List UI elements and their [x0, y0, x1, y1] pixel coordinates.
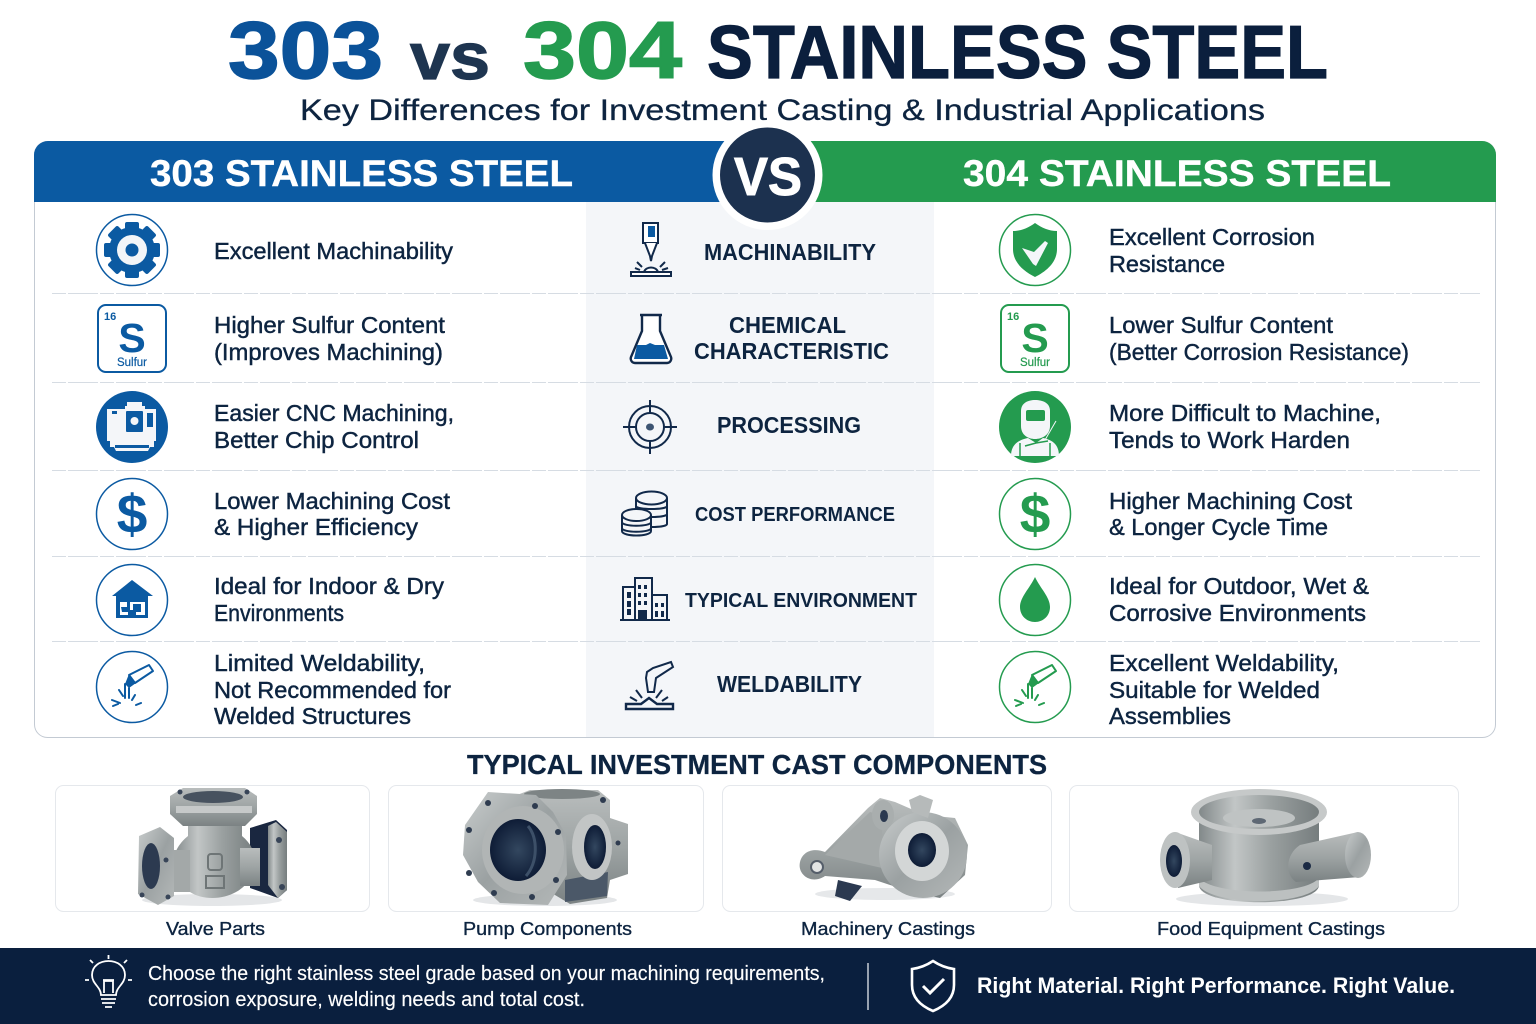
left column texts: (Improves Machining) [214, 339, 443, 365]
centre icon: flask [631, 315, 671, 363]
right column texts: Higher Machining Cost [1109, 488, 1353, 514]
header: 303 [34, 141, 730, 202]
card: pump components [388, 786, 704, 939]
icon: weld torch blue [96, 652, 168, 722]
icon: shield green [1000, 214, 1070, 286]
card: valve parts [56, 786, 370, 939]
footer advice text [148, 963, 825, 1011]
footer advice text: Choose the right stainless steel grade based on your machining requirements, [148, 963, 825, 985]
left column texts: Better Chip Control [214, 427, 419, 453]
centre label: chemical characteristic: CHARACTERISTIC [694, 338, 889, 364]
icon: sulfur green: Sulfur [1020, 357, 1050, 369]
icon: sulfur blue: Sulfur [117, 357, 147, 369]
left column texts: Ideal for Indoor & Dry [214, 573, 445, 599]
centre label: chemical characteristic [694, 312, 889, 364]
centre icon: target [623, 400, 677, 454]
centre label: chemical characteristic: CHEMICAL [729, 312, 846, 338]
right column texts: More Difficult to Machine, [1109, 400, 1381, 426]
icon: sulfur green: 16 [1007, 311, 1019, 323]
icon: CNC machine [96, 391, 168, 463]
pump casting [463, 789, 628, 906]
icon: dollar green: $ [1020, 483, 1050, 545]
centre icon: buildings [620, 578, 670, 620]
right column texts: Tends to Work Harden [1109, 427, 1350, 453]
icon: dollar green [1000, 478, 1070, 550]
centre label: weldability: WELDABILITY [717, 671, 862, 697]
label: Machinery Castings [801, 918, 975, 939]
food equipment casting [1160, 789, 1371, 906]
icon: gear [96, 214, 168, 286]
right column texts: Assemblies [1109, 703, 1231, 729]
subtitle: Key Differences for Investment Casting & Industrial Applications [300, 94, 1265, 127]
right column texts: Corrosive Environments [1109, 600, 1366, 626]
left column texts: Lower Machining Cost [214, 488, 451, 514]
icon: house [96, 564, 168, 636]
right column texts: Resistance [1109, 251, 1225, 277]
footer band [0, 948, 1536, 1024]
centre column background [586, 202, 934, 737]
VS badge: VS [734, 147, 802, 207]
right column texts: Excellent Weldability, [1109, 650, 1339, 676]
label: Food Equipment Castings [1157, 918, 1385, 939]
icon: shield check [912, 961, 954, 1011]
icon: water drop [1000, 564, 1070, 636]
row dividers [52, 294, 1480, 642]
footer slogan: Right Material. Right Performance. Right Value. [977, 973, 1455, 998]
icon: sulfur blue [98, 305, 166, 372]
left column texts: Environments [214, 600, 344, 626]
centre icon: coins [622, 492, 667, 536]
right column texts: (Better Corrosion Resistance) [1109, 339, 1409, 365]
right column texts: Excellent Corrosion [1109, 224, 1315, 250]
label: Valve Parts [166, 918, 265, 939]
valve casting [138, 788, 287, 906]
centre icon: machining nozzle [631, 223, 671, 276]
centre label: cost performance: COST PERFORMANCE [695, 504, 895, 526]
card: machinery castings [722, 786, 1052, 939]
right column texts [1109, 224, 1409, 729]
VS badge [712, 120, 822, 230]
left column texts: Not Recommended for [214, 677, 451, 703]
left column texts [214, 238, 454, 729]
icon: dollar blue: $ [117, 483, 147, 545]
left column texts: Excellent Machinability [214, 238, 454, 264]
right column texts: & Longer Cycle Time [1109, 514, 1328, 540]
left column texts: & Higher Efficiency [214, 514, 419, 540]
title: 304 [523, 6, 682, 96]
card: food equipment castings [1070, 786, 1458, 939]
title [228, 6, 1328, 96]
left column texts: Welded Structures [214, 703, 411, 729]
centre label: processing: PROCESSING [717, 412, 861, 438]
left column texts: Higher Sulfur Content [214, 312, 446, 338]
icon: sulfur blue: S [118, 315, 146, 361]
header: 304 [800, 141, 1496, 202]
machinery casting [800, 795, 968, 901]
title: STAINLESS STEEL [707, 10, 1328, 94]
footer advice text: corrosion exposure, welding needs and total cost. [148, 989, 585, 1011]
section heading: TYPICAL INVESTMENT CAST COMPONENTS [467, 749, 1047, 780]
header: 304: 304 STAINLESS STEEL [963, 152, 1391, 194]
icon: sulfur green: S [1021, 315, 1049, 361]
centre icon: welding [626, 662, 673, 709]
icon: sulfur green [1001, 305, 1069, 372]
header: 303: 303 STAINLESS STEEL [150, 152, 573, 194]
icon: sulfur blue: 16 [104, 311, 116, 323]
label: Pump Components [463, 918, 632, 939]
right column texts: Suitable for Welded [1109, 677, 1320, 703]
centre label: machinability: MACHINABILITY [704, 239, 876, 265]
centre label: typical environment: TYPICAL ENVIRONMENT [685, 590, 917, 612]
comparison panel [34, 120, 1496, 738]
icon: weld torch green [1000, 652, 1070, 722]
title: 303 [228, 6, 383, 96]
right column texts: Ideal for Outdoor, Wet & [1109, 573, 1369, 599]
left column texts: Limited Weldability, [214, 650, 425, 676]
icon: welder [999, 391, 1071, 463]
right column texts: Lower Sulfur Content [1109, 312, 1334, 338]
title: vs [410, 19, 490, 93]
icon: dollar blue [96, 478, 168, 550]
icon: light bulb [85, 955, 132, 1007]
left column texts: Easier CNC Machining, [214, 400, 454, 426]
